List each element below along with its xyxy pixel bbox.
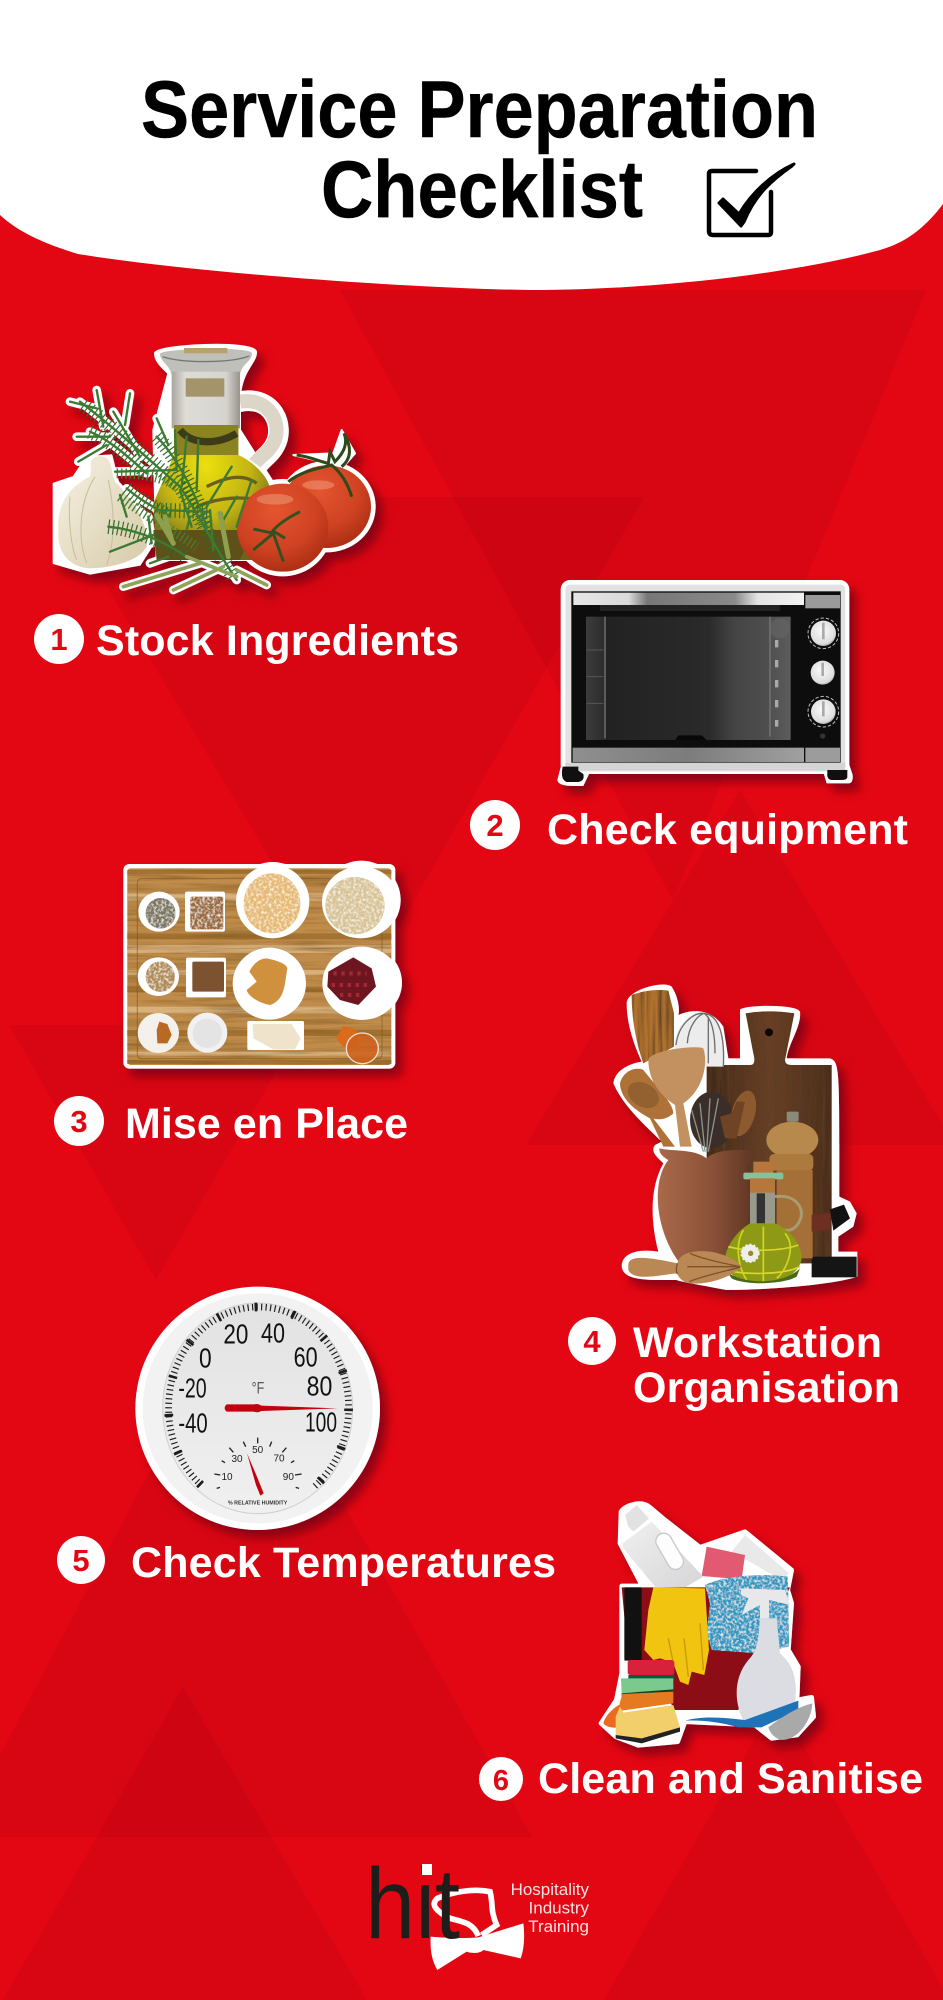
logo tagline: Industry [529,1898,589,1918]
illustration: workstation utensils [613,985,857,1290]
bucket [622,1587,790,1710]
title: Service Preparation [141,65,818,155]
label: step 2: 2 [486,808,504,843]
board hanging hole [765,1028,773,1036]
citrus juicer [628,1251,742,1284]
illustration: oven [557,580,853,786]
glass of oil [336,1026,378,1064]
yellow glove [644,1587,709,1685]
logo [365,1848,589,1970]
label: step 3: 3 [70,1104,88,1139]
sponges [603,1660,680,1743]
needles [225,1404,338,1496]
illustration: mise en place board [123,861,402,1069]
bottle [622,1505,703,1587]
logo bow tie [431,1890,524,1970]
cloth and card [702,1535,789,1580]
oven body [562,585,847,782]
label: step 1: Stock Ingredients [96,617,459,665]
label: step 4: Organisation [633,1364,900,1412]
label: step 5: Check Temperatures [131,1539,556,1587]
grains in bowls [146,873,385,992]
sieve, whisk wires and peeler [690,1088,761,1152]
black pipe [624,1587,642,1661]
logo tagline: Hospitality [511,1880,589,1899]
temperature numbers: -20 [178,1373,207,1404]
humidity scale: 50 [252,1445,264,1456]
label: step 4 [568,1317,900,1412]
pepper mill [766,1112,857,1277]
label: step 1: 1 [50,622,68,657]
temperature numbers: 0 [199,1342,212,1373]
label: step 2: Check equipment [547,806,908,854]
garlic [58,456,147,568]
icon: checkbox [709,164,794,235]
temperature numbers: -40 [178,1408,208,1439]
logo wordmark: hit [365,1848,460,1960]
whisk [675,1012,724,1067]
label: step 6: 6 [493,1765,509,1797]
tomatoes [237,433,371,572]
humidity scale: % RELATIVE HUMIDITY [228,1500,288,1506]
temperature numbers: 20 [223,1318,248,1349]
rosemary [70,390,267,590]
temperature numbers: 60 [294,1342,318,1373]
title: Checklist [321,145,643,235]
temperature numbers: 100 [305,1407,337,1438]
cutting board [707,1011,832,1263]
label: step 4: Workstation [633,1319,882,1367]
white header panel [0,0,943,290]
clay pot [658,1148,755,1263]
wooden spoons [620,1047,705,1147]
temperature numbers: 80 [307,1371,332,1402]
small bowls and ramekins [138,892,304,1053]
illustration: thermometer [135,1287,380,1530]
large bowls [233,865,401,1020]
microfibre mop [705,1575,789,1653]
wood board [127,868,391,1065]
jug [153,348,277,560]
label: step 5: 5 [72,1543,90,1578]
temperature numbers: °F [252,1378,264,1397]
label: step 3: Mise en Place [125,1100,408,1148]
brush [685,1701,812,1740]
logo tagline: Training [528,1917,589,1936]
temperature numbers [178,1318,337,1439]
humidity scale: 30 [231,1454,243,1465]
label: step 4: 4 [583,1324,601,1359]
illustration: ingredients [53,345,375,590]
long spoon [632,990,674,1063]
oven knobs [808,618,839,739]
humidity scale: 10 [221,1472,233,1483]
humidity scale: 70 [273,1453,285,1464]
humidity scale [214,1438,302,1506]
illustration: cleaning supplies [601,1504,814,1745]
logo i dot [422,1864,432,1875]
spray bottle [737,1588,796,1723]
label: step 6: Clean and Sanitise [538,1755,923,1803]
humidity scale: 90 [283,1472,294,1483]
oil bottle [725,1162,802,1283]
temperature numbers: 40 [261,1318,285,1349]
dial ticks [169,1307,349,1487]
